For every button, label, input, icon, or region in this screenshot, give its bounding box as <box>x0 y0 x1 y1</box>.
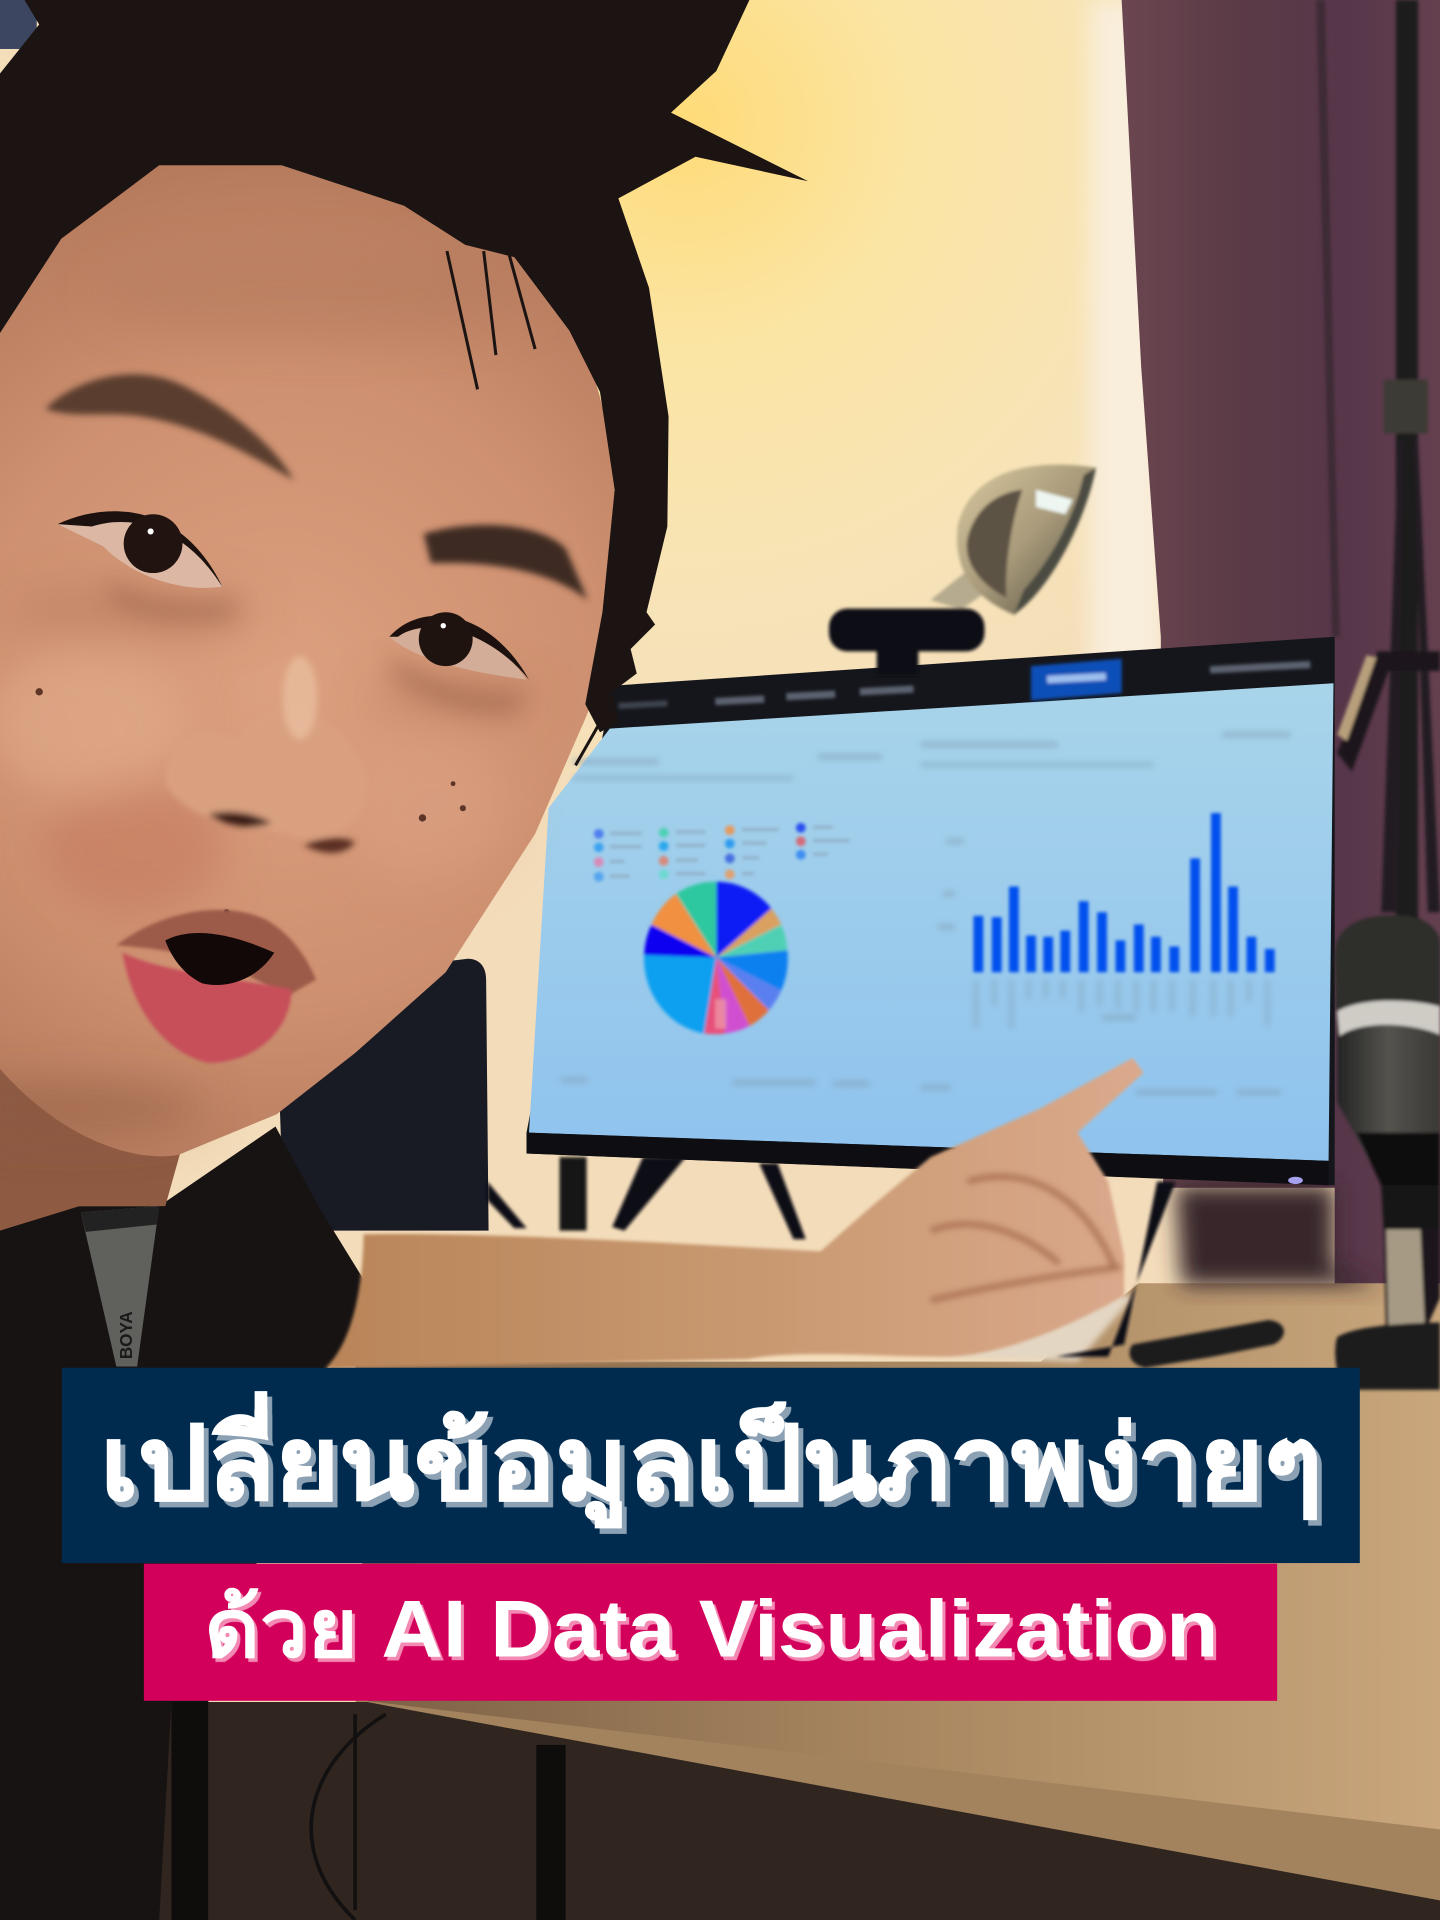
dark second monitor <box>276 959 489 1231</box>
top navigation bar <box>618 659 1310 709</box>
clip-on microphone <box>81 1206 159 1367</box>
hair strands <box>447 251 600 765</box>
subtitle banner: ด้วย AI Data Visualization <box>204 1585 1218 1675</box>
bottom bezel <box>527 1133 1329 1185</box>
black shirt <box>0 1127 364 1920</box>
desk <box>122 1283 1440 1920</box>
left eyebrow <box>45 374 294 480</box>
tripod stand and cable <box>1316 0 1440 931</box>
desk legs and cables <box>171 1702 566 1920</box>
title banner: เปลี่ยนข้อมูลเป็นภาพง่ายๆ <box>100 1391 1322 1528</box>
person <box>0 0 1144 1920</box>
bar chart axis labels <box>973 980 1270 1029</box>
dark equipment under the monitor <box>1176 1185 1384 1286</box>
hair <box>0 0 808 732</box>
title banner <box>62 1368 1360 1563</box>
nose <box>165 656 367 853</box>
face shading <box>0 250 539 1135</box>
bar chart <box>973 813 1275 972</box>
screen labels <box>561 732 1291 1095</box>
remote on desk <box>1130 1320 1284 1368</box>
pie legend <box>594 823 850 882</box>
left eye <box>58 511 223 588</box>
webcam <box>829 609 984 676</box>
screen <box>529 683 1333 1161</box>
eye socket shadows <box>110 582 527 713</box>
fingers detail <box>931 1177 1120 1300</box>
subtitle banner <box>144 1564 1277 1701</box>
clip-on microphone: BOYA <box>116 1311 136 1359</box>
keyboard behind hand <box>943 1286 1133 1362</box>
monitor stand <box>487 1157 1176 1357</box>
desk lamp <box>931 465 1096 615</box>
monitor frame <box>527 637 1335 1185</box>
arm and hand <box>324 1058 1144 1369</box>
neck <box>0 1053 208 1231</box>
curtain <box>1122 0 1440 1298</box>
pie chart <box>644 882 788 1034</box>
moles <box>36 688 466 915</box>
mouth <box>116 910 316 1063</box>
face <box>0 150 615 1156</box>
microphone <box>1335 915 1440 1390</box>
right eye <box>389 612 529 680</box>
monitor <box>527 637 1335 1185</box>
right eyebrow <box>424 525 588 600</box>
